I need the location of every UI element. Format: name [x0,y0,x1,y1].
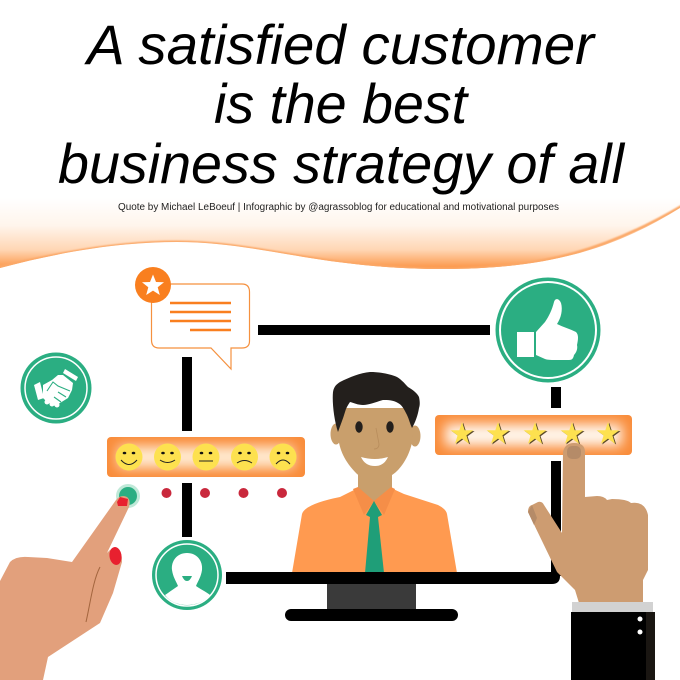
title: is the best [214,72,469,135]
person: smiling man [292,372,457,573]
attribution text: Quote by Michael LeBoeuf | Infographic by @agrassoblog for educational and motivational purposes [118,202,559,213]
ears [330,424,420,446]
selected green dot [116,484,140,508]
suit sleeve and cuff [571,602,655,680]
hair [333,372,420,432]
shirt [292,488,457,573]
neck [358,462,392,502]
collar [353,487,395,515]
five stars [451,422,621,444]
smile [361,457,388,466]
title [58,13,626,195]
icon: customer avatar badge [152,540,222,610]
face [338,408,413,480]
red selection dots [162,488,287,498]
nose [374,428,379,449]
icon: handshake badge [20,352,92,424]
eyes [355,421,394,433]
connector lines [182,325,561,576]
speech bubble with star badge [135,267,250,369]
star rating bar [435,415,632,455]
right hand pointing [528,443,648,603]
monitor [226,572,560,621]
emoji faces [116,444,296,470]
title: business strategy of all [58,132,626,195]
tie [365,501,384,573]
orange wave band [0,204,680,269]
emoji rating bar [107,437,305,477]
icon: thumbs up badge [496,278,600,382]
left hand pointing [0,496,130,680]
title: A satisfied customer [84,13,596,76]
